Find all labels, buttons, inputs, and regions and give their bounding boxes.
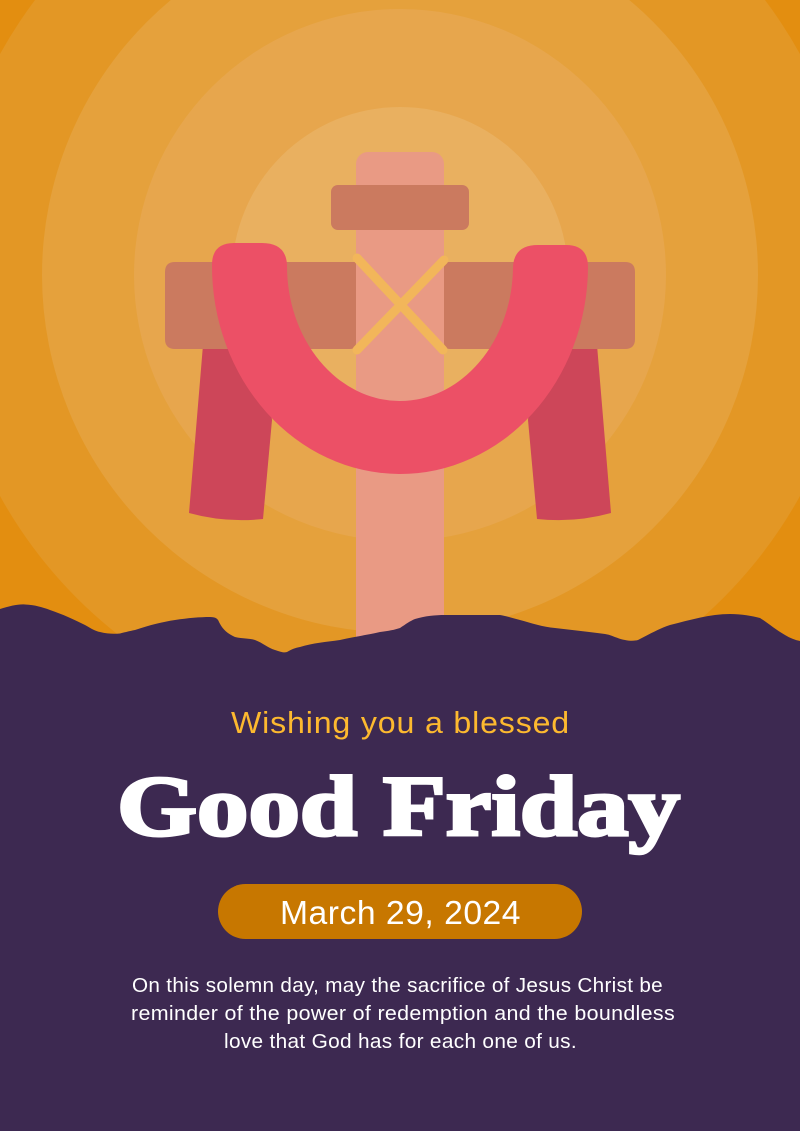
date pill: March 29, 2024 xyxy=(280,894,521,931)
cloth draped loop xyxy=(212,243,588,474)
illustration: cross with draped cloth xyxy=(165,152,635,652)
message text: reminder of the power of redemption and the boundless xyxy=(131,1003,675,1025)
cloth right hanging end xyxy=(528,345,611,520)
cross top sign xyxy=(331,185,469,230)
message text: On this solemn day, may the sacrifice of Jesus Christ be xyxy=(132,975,663,997)
date pill xyxy=(218,884,582,939)
message text xyxy=(131,975,675,1053)
hill silhouette and lower panel xyxy=(0,604,800,1131)
sunburst background xyxy=(0,0,800,732)
cross right arm xyxy=(444,262,635,349)
message text: love that God has for each one of us. xyxy=(224,1031,577,1053)
title: Good Friday xyxy=(117,758,680,854)
cloth left hanging end xyxy=(189,345,272,520)
cross vertical beam xyxy=(356,152,444,652)
cross left arm xyxy=(165,262,356,349)
greeting line: Wishing you a blessed xyxy=(231,705,570,740)
rope binding xyxy=(357,258,444,350)
